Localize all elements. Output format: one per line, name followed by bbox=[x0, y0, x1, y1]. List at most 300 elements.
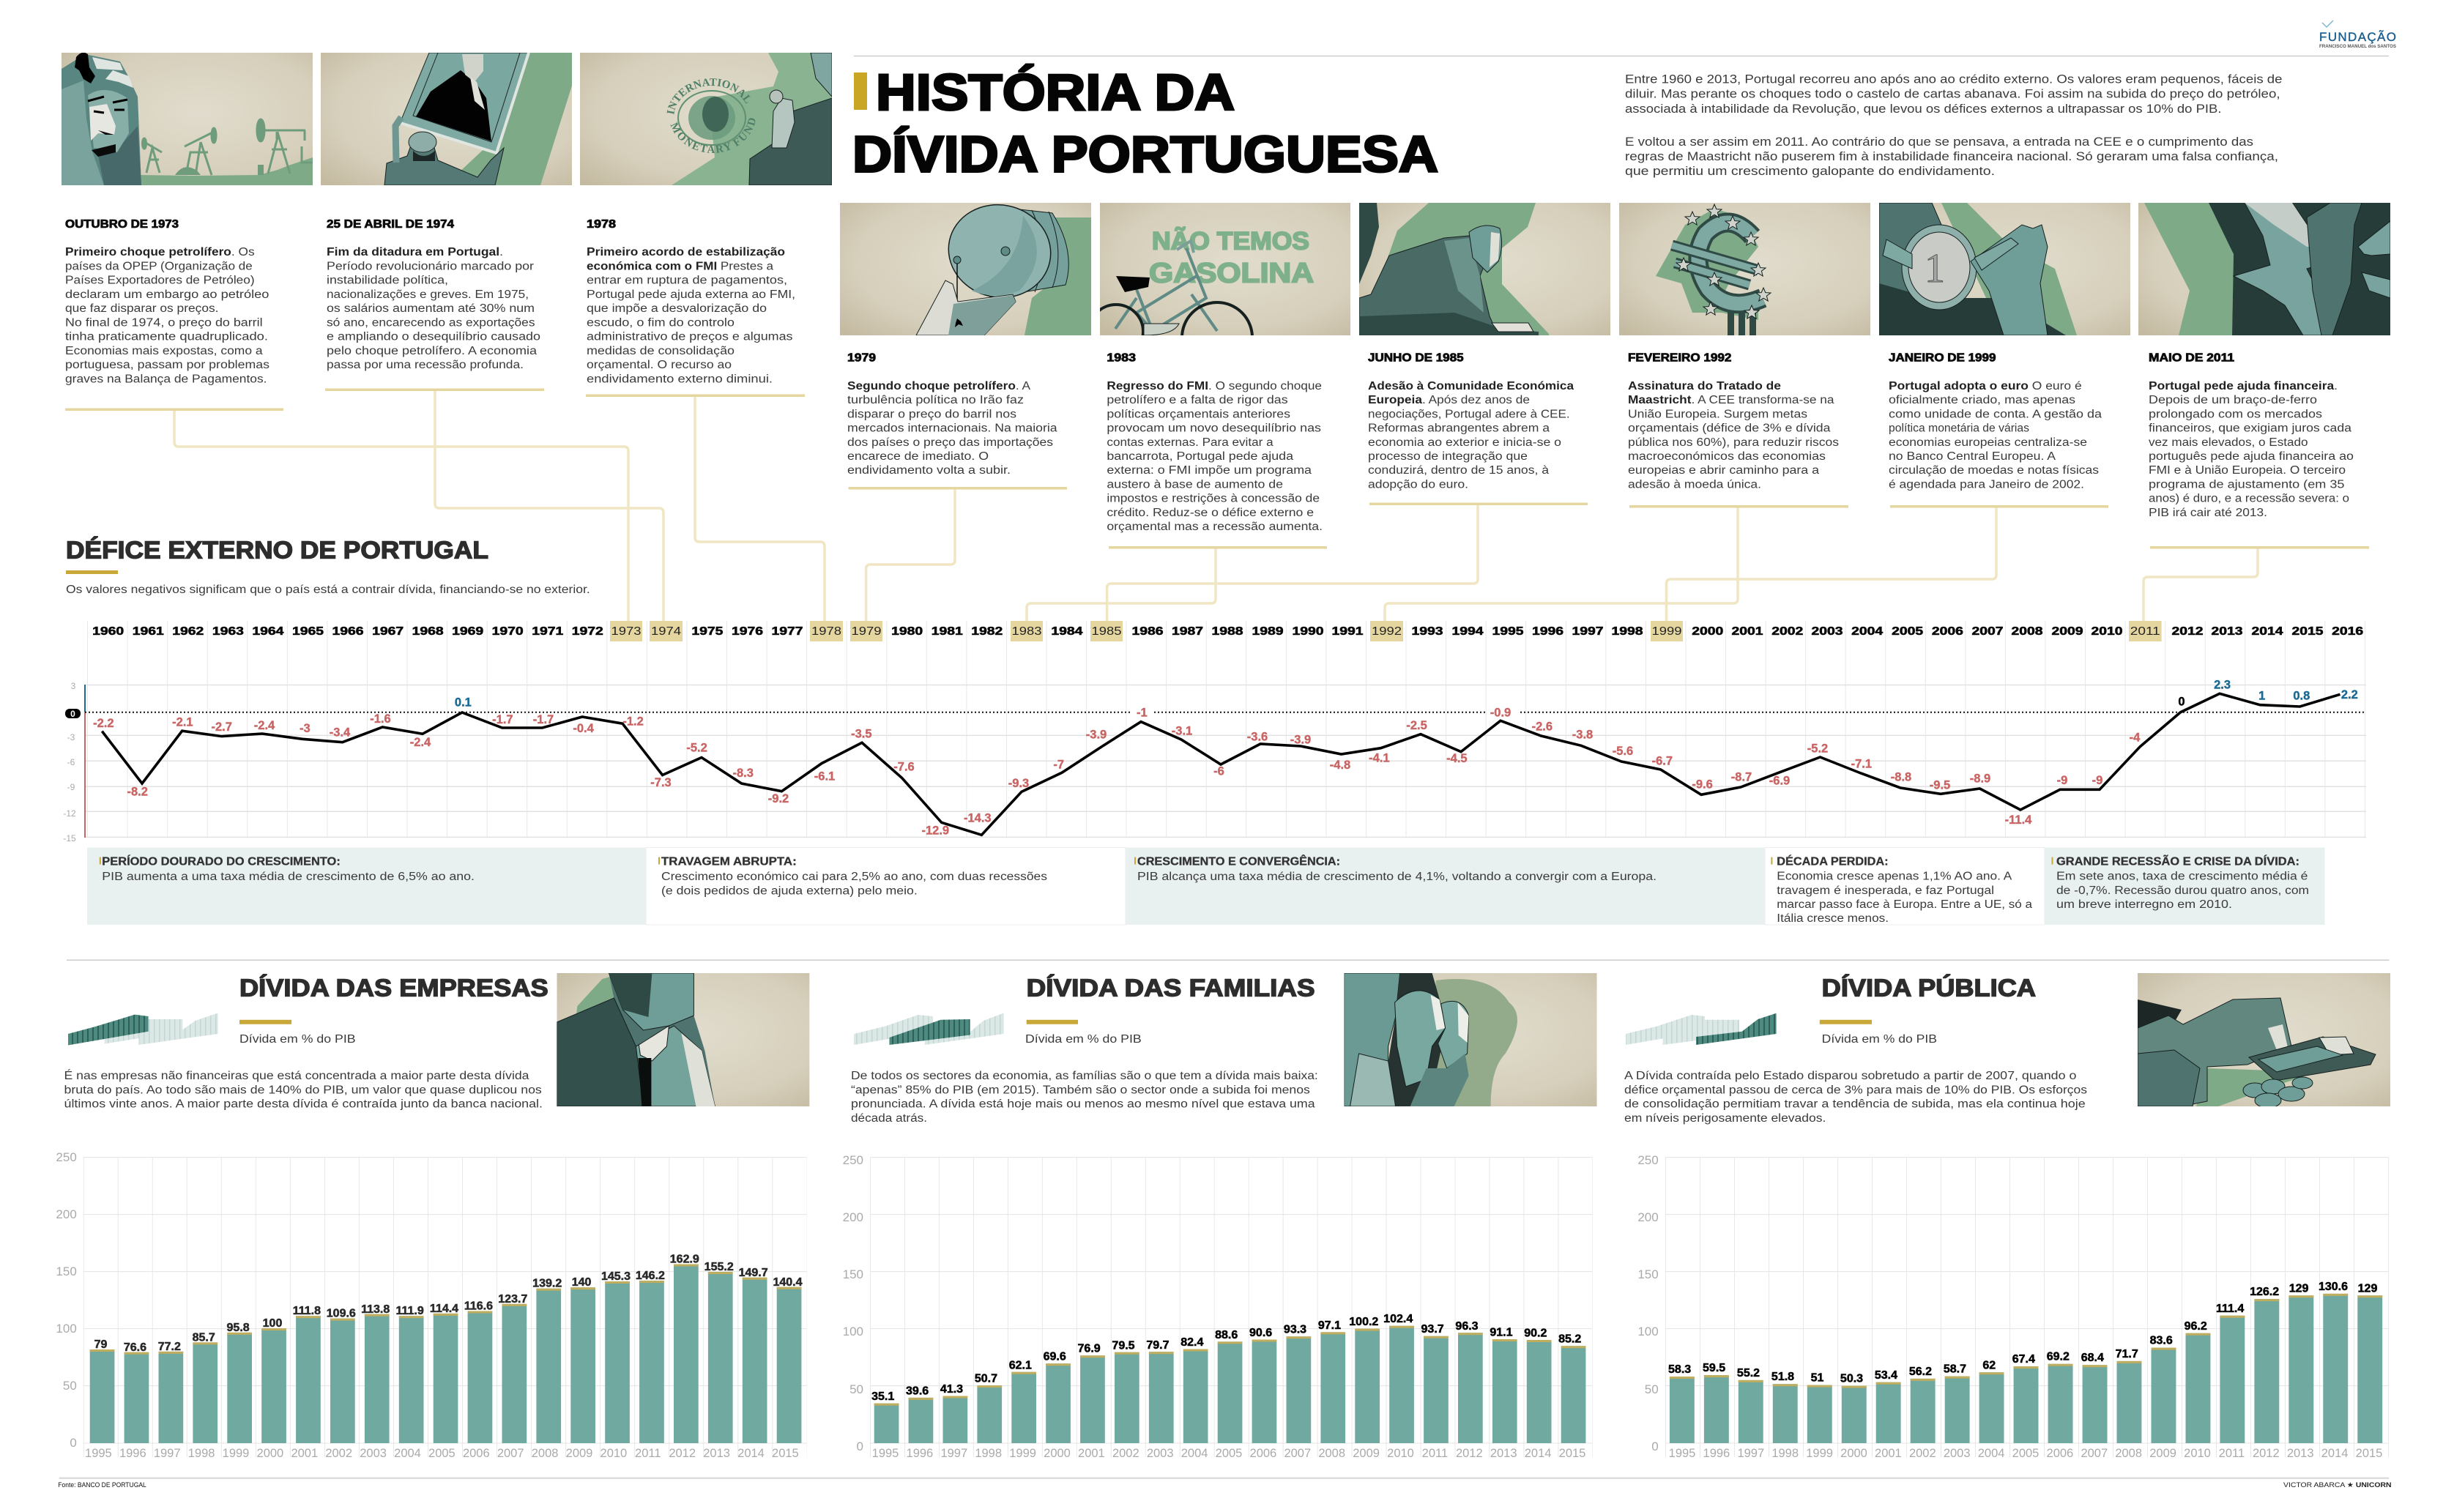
bar chart: public debt: 50.3 bbox=[1840, 1373, 1863, 1385]
bar chart: companies debt: 2005 bbox=[428, 1447, 456, 1460]
event: Maio de 2011: FMI e à União Europeia. O terceiro bbox=[2149, 464, 2346, 477]
text: public debt: A Dívida contraída pelo Estado disparou sobretudo a partir de 2007, quando o bbox=[1624, 1070, 2076, 1082]
bar chart: public debt: 2011 bbox=[2219, 1447, 2245, 1460]
illustration: bicycle and Não temos gasolina: GASOLINA bbox=[1149, 258, 1314, 289]
timeline years: 1996 bbox=[1532, 625, 1564, 638]
bar chart: family debt: 100.2 bbox=[1349, 1316, 1378, 1328]
bar chart: public debt: 126.2 bbox=[2250, 1286, 2279, 1298]
line chart: external deficit: -14.3 bbox=[964, 812, 992, 825]
panel: Grande recessão e crise da dívida: GRANDE RECESSÃO E CRISE DA DÍVIDA: bbox=[2056, 855, 2299, 868]
line chart: external deficit: -7 bbox=[1053, 758, 1064, 771]
timeline years: 1965 bbox=[292, 625, 324, 638]
event: 1983: Regresso do FMI . O segundo choque bbox=[1107, 380, 1322, 392]
bar chart: public debt: 71.7 bbox=[2116, 1348, 2138, 1360]
bar chart: public debt: 58.7 bbox=[1944, 1363, 1966, 1376]
event: Fevereiro 1992: macroeconómicos das economias bbox=[1628, 450, 1826, 463]
footer: credits: VICTOR ABARCA ★ UNICORN bbox=[2283, 1481, 2392, 1489]
event: 25 de Abril de 1974: só ano, encarecendo as exportações bbox=[327, 316, 535, 329]
timeline years: 1968 bbox=[412, 625, 444, 638]
event: 1983 bbox=[1107, 351, 1323, 533]
timeline years: 1975 bbox=[691, 625, 724, 638]
bar chart: family debt: 93.3 bbox=[1284, 1324, 1306, 1336]
line chart: external deficit: -9 bbox=[2057, 774, 2067, 787]
bar chart: public debt: 2014 bbox=[2321, 1447, 2348, 1460]
line chart: external deficit: -2.2 bbox=[93, 717, 114, 730]
line chart: external deficit: -1.2 bbox=[622, 715, 644, 728]
logo: Fundação Francisco Manuel dos Santos: FUNDAÇÃO bbox=[2319, 30, 2396, 44]
section heading: Dívida pública: DÍVIDA PÚBLICA bbox=[1822, 975, 2036, 1002]
bar chart: companies debt: 2007 bbox=[497, 1447, 524, 1460]
bar chart: family debt: 39.6 bbox=[906, 1385, 929, 1397]
event: 1983: 1983 bbox=[1107, 351, 1136, 365]
event: Fevereiro 1992: União Europeia. Surgem metas bbox=[1628, 408, 1807, 420]
bar chart: companies debt: 50 bbox=[63, 1379, 77, 1393]
timeline years: 1984 bbox=[1051, 625, 1083, 638]
timeline years: 1986 bbox=[1132, 625, 1164, 638]
text: companies bbox=[64, 1070, 543, 1111]
event: 25 de Abril de 1974: os salários aumentam até 30% num bbox=[327, 302, 535, 315]
timeline years: 2005 bbox=[1892, 625, 1924, 638]
text: public debt bbox=[1624, 1070, 2087, 1125]
bar chart: public debt: 2000 bbox=[1840, 1447, 1867, 1460]
timeline years: 1977 bbox=[772, 625, 803, 638]
footer: source: Fonte: BANCO DE PORTUGAL bbox=[58, 1481, 146, 1489]
icon: mini bars, public debt highlighted bbox=[1626, 1013, 1777, 1045]
line chart: external deficit: -2.7 bbox=[211, 720, 232, 734]
event: Janeiro de 1999 bbox=[1889, 351, 2102, 491]
bar chart: companies debt: 162.9 bbox=[670, 1254, 699, 1265]
bar chart: family debt: 62.1 bbox=[1009, 1359, 1032, 1371]
event: 1978: que impõe a desvalorização do bbox=[587, 302, 767, 315]
bar chart: family debt: 2012 bbox=[1456, 1447, 1483, 1460]
event: Junho de 1985: economia ao exterior e inicia-se o bbox=[1368, 436, 1561, 449]
bar chart: companies debt: 149.7 bbox=[739, 1267, 768, 1279]
bar chart: public debt: 2012 bbox=[2253, 1447, 2280, 1460]
timeline years: 2004 bbox=[1851, 625, 1884, 638]
event: 1978: Portugal pede ajuda externa ao FMI, bbox=[587, 288, 795, 301]
bar chart: family debt: 0 bbox=[857, 1440, 863, 1453]
bar chart: public debt: 1995 bbox=[1669, 1447, 1695, 1460]
event: Maio de 2011: programa de ajustamento (em 35 bbox=[2149, 478, 2345, 491]
bar chart: companies debt: 2014 bbox=[737, 1447, 765, 1460]
line chart: external deficit: -5.2 bbox=[1807, 742, 1828, 756]
bar chart: companies debt: 2004 bbox=[394, 1447, 421, 1460]
heading: Défice externo de Portugal bbox=[66, 536, 590, 596]
bar chart: public debt: 2010 bbox=[2184, 1447, 2211, 1460]
text: families: década atrás. bbox=[851, 1112, 927, 1125]
illustration: empty wallet bbox=[2138, 203, 2390, 335]
illustration: one euro coin between fingers: 1 bbox=[1925, 246, 1945, 291]
event: Junho de 1985: adopção do euro. bbox=[1368, 478, 1468, 491]
section heading: Dívida das familias bbox=[1025, 975, 1315, 1046]
bar chart: companies debt: 95.8 bbox=[227, 1322, 250, 1334]
panel: Crescimento e convergência: CRESCIMENTO E CONVERGÊNCIA: bbox=[1137, 855, 1340, 868]
event: Janeiro de 1999: economias europeias centraliza-se bbox=[1889, 436, 2087, 449]
bar chart: public debt: 250 bbox=[1637, 1153, 1659, 1167]
event: Junho de 1985: negociações, Portugal adere à CEE. bbox=[1368, 408, 1570, 420]
line chart: external deficit: -1.7 bbox=[533, 713, 554, 726]
bar chart: public debt: 200 bbox=[1637, 1210, 1659, 1224]
bar chart: public debt: 1997 bbox=[1737, 1447, 1764, 1460]
event: Janeiro de 1999: no Banco Central Europeu. A bbox=[1889, 450, 2056, 463]
bar chart: public debt: 51.8 bbox=[1771, 1371, 1794, 1383]
panel: Década perdida: travagem é inesperada, e faz Portugal bbox=[1777, 885, 1994, 897]
bar chart: public debt: 1999 bbox=[1806, 1447, 1833, 1460]
event: 1983: externa: o FMI impõe um programa bbox=[1107, 464, 1312, 477]
text: families: “apenas” 85% do PIB (em 2015). Também são o sector onde a subida foi menos bbox=[851, 1084, 1310, 1096]
line chart: external deficit: -8.2 bbox=[127, 786, 148, 799]
event: Fevereiro 1992: pública nos 60%), para reduzir riscos bbox=[1628, 436, 1839, 449]
timeline years: 1990 bbox=[1292, 625, 1324, 638]
illustration: family looking ahead bbox=[1345, 973, 1597, 1106]
timeline years: 2014 bbox=[2251, 625, 2283, 638]
timeline years: 2006 bbox=[1932, 625, 1963, 638]
bar chart: companies debt: 1996 bbox=[119, 1447, 146, 1460]
intro text: que permitiu um crescimento galopante do endividamento. bbox=[1625, 164, 1995, 178]
event: 1979: dos países o preço das importações bbox=[847, 436, 1053, 449]
bar chart: companies debt: 250 bbox=[56, 1150, 77, 1164]
timeline years: 1992 bbox=[1372, 625, 1402, 638]
bar chart: companies debt: 111.9 bbox=[395, 1305, 424, 1317]
event: Outubro de 1973: No final de 1974, o preço do barril bbox=[65, 316, 263, 329]
event: 25 de Abril de 1974: passa por uma recessão profunda. bbox=[327, 359, 524, 371]
bar chart: companies debt: 100 bbox=[263, 1317, 282, 1330]
panel: Crescimento e convergência bbox=[1126, 848, 1765, 925]
event: 1979: disparar o preço do barril nos bbox=[847, 408, 1016, 420]
bar chart: public debt: 100 bbox=[1637, 1325, 1659, 1338]
timeline years: 2010 bbox=[2092, 625, 2122, 638]
timeline years: 2002 bbox=[1771, 625, 1803, 638]
timeline years: 1998 bbox=[1611, 625, 1643, 638]
panel: Crescimento e convergência: PIB alcança uma taxa média de crescimento de 4,1%, voltando a convergir com a Europa. bbox=[1137, 871, 1657, 883]
timeline years: 1960 bbox=[92, 625, 124, 638]
event: 1978 bbox=[587, 218, 795, 385]
bar chart: companies debt: 114.4 bbox=[430, 1303, 458, 1315]
timeline years bbox=[92, 621, 2364, 641]
bar chart: family debt: 1996 bbox=[907, 1447, 933, 1460]
bar chart: companies debt: 1998 bbox=[188, 1447, 215, 1460]
line chart: external deficit: -3.4 bbox=[330, 726, 351, 740]
line chart: external deficit: -8.3 bbox=[732, 767, 754, 780]
bar chart: public debt: 53.4 bbox=[1875, 1369, 1897, 1382]
title bbox=[852, 64, 1438, 183]
illustration: IMF seal and man with coin: INTERNATIONAL bbox=[666, 78, 750, 114]
section heading: Dívida das empresas: DÍVIDA DAS EMPRESAS bbox=[239, 975, 549, 1002]
bar chart: public debt: 2013 bbox=[2287, 1447, 2314, 1460]
bar chart: public debt: 62 bbox=[1982, 1359, 1996, 1371]
timeline years: 1969 bbox=[452, 625, 484, 638]
event: Janeiro de 1999: como unidade de conta. A gestão da bbox=[1889, 408, 2102, 420]
bar chart: companies debt: 111.8 bbox=[293, 1305, 321, 1317]
event: Outubro de 1973: Primeiro choque petrolífero . Os bbox=[65, 246, 255, 258]
bar chart: public debt: 2005 bbox=[2012, 1447, 2039, 1460]
event: Maio de 2011 bbox=[2149, 351, 2354, 519]
panel: Travagem abrupta bbox=[646, 848, 1126, 925]
bar chart: companies debt: 2011 bbox=[635, 1447, 661, 1460]
bar chart: public debt: 55.2 bbox=[1737, 1367, 1760, 1379]
event: Janeiro de 1999: oficialmente criado, mas apenas bbox=[1889, 394, 2075, 406]
bar chart: companies debt: 85.7 bbox=[193, 1331, 215, 1344]
section heading: Dívida das familias: Dívida em % do PIB bbox=[1025, 1033, 1142, 1046]
event: 1978: 1978 bbox=[587, 218, 616, 231]
event: Outubro de 1973 bbox=[65, 218, 269, 385]
heading: Défice externo de Portugal: DÉFICE EXTERNO DE PORTUGAL bbox=[66, 536, 488, 564]
line chart: external deficit: -5.2 bbox=[686, 741, 707, 754]
event: Junho de 1985: processo de integração que bbox=[1368, 450, 1528, 463]
intro text: diluir. Mas perante os choques todo o castelo de cartas abanava. Foi assim na subida do preço do petróleo, bbox=[1625, 86, 2280, 100]
line chart: external deficit: -3.9 bbox=[1290, 734, 1311, 747]
bar chart: companies debt bbox=[56, 1150, 807, 1460]
event: 25 de Abril de 1974: pelo choque petrolífero. A economia bbox=[327, 345, 537, 357]
event: Maio de 2011: PIB irá cair até 2013. bbox=[2149, 507, 2267, 519]
bar chart: family debt: 97.1 bbox=[1318, 1319, 1341, 1332]
bar chart: public debt: 2007 bbox=[2081, 1447, 2108, 1460]
bar chart: public debt: 0 bbox=[1651, 1440, 1659, 1453]
line chart: external deficit: -4.1 bbox=[1369, 751, 1390, 764]
line chart: external deficit: 0 bbox=[2178, 696, 2185, 709]
panel: Grande recessão e crise da dívida: Em sete anos, taxa de crescimento média é bbox=[2056, 871, 2308, 883]
text: public debt: défice orçamental passou de cerca de 3% para mais de 10% do PIB. Os esforços bbox=[1624, 1084, 2087, 1096]
event: Maio de 2011: Depois de um braço-de-ferro bbox=[2149, 394, 2317, 406]
illustration: bicycle and Não temos gasolina: NÃO TEMOS bbox=[1152, 227, 1309, 255]
bar chart: public debt bbox=[1637, 1153, 2389, 1460]
icon: mini bars, families highlighted bbox=[854, 1013, 1004, 1045]
line chart: external deficit: -3.9 bbox=[1086, 728, 1107, 741]
panel: Travagem abrupta: Crescimento económico cai para 2,5% ao ano, com duas recessões bbox=[661, 871, 1047, 883]
bar chart: companies debt: 2006 bbox=[463, 1447, 490, 1460]
line chart: external deficit: -3.1 bbox=[1172, 725, 1192, 738]
bar chart: family debt: 2014 bbox=[1525, 1447, 1551, 1460]
event: 1983: provocam um novo desequilíbrio nas bbox=[1107, 422, 1321, 435]
line chart: external deficit: 3 bbox=[71, 681, 76, 691]
bar chart: family debt: 88.6 bbox=[1215, 1329, 1238, 1341]
event: Junho de 1985: Reformas abrangentes abrem a bbox=[1368, 422, 1550, 435]
timeline years: 2012 bbox=[2172, 625, 2203, 638]
bar chart: companies debt: 2001 bbox=[291, 1447, 318, 1460]
timeline years: 1973 bbox=[611, 625, 642, 638]
timeline years: 1964 bbox=[252, 625, 284, 638]
bar chart: family debt: 2015 bbox=[1559, 1447, 1585, 1460]
bar chart: companies debt: 79 bbox=[94, 1338, 107, 1351]
timeline years: 1978 bbox=[811, 625, 841, 638]
bar chart: family debt: 82.4 bbox=[1180, 1336, 1203, 1349]
text: public debt: em níveis perigosamente elevados. bbox=[1624, 1112, 1826, 1125]
text: public debt: de consolidação permitiam travar a tendência de subida, mas ela continua hoje bbox=[1624, 1098, 2086, 1111]
line chart: external deficit: -3.8 bbox=[1572, 729, 1593, 742]
timeline years: 1995 bbox=[1492, 625, 1524, 638]
event: Fevereiro 1992: FEVEREIRO 1992 bbox=[1628, 351, 1731, 365]
panel: Década perdida: Economia cresce apenas 1,1% AO ano. A bbox=[1777, 871, 2012, 883]
bar chart: public debt: 129 bbox=[2289, 1282, 2309, 1295]
panel: Década perdida: DÉCADA PERDIDA: bbox=[1777, 856, 1889, 868]
bar chart: family debt: 96.3 bbox=[1455, 1320, 1479, 1333]
line chart: external deficit: -11.4 bbox=[2005, 813, 2032, 827]
panel: Travagem abrupta: (e dois pedidos de ajuda externa) pelo meio. bbox=[661, 885, 918, 897]
line chart: external deficit: -2.6 bbox=[1532, 720, 1553, 734]
event: 1983: petrolífero e a falta de rigor das bbox=[1107, 394, 1288, 406]
bar chart: companies debt: 116.6 bbox=[464, 1300, 493, 1312]
line chart: external deficit: -4 bbox=[2130, 731, 2141, 745]
event: 1983: austero à base de aumento de bbox=[1107, 478, 1283, 491]
text: companies: bruta do país. Ao todo são mais de 140% do PIB, um valor que quase duplicou nos bbox=[64, 1084, 542, 1096]
timeline years: 2015 bbox=[2292, 625, 2324, 638]
timeline years: 2016 bbox=[2332, 625, 2364, 638]
panel: Década perdida bbox=[1765, 848, 2045, 925]
bar chart: companies debt: 140.4 bbox=[773, 1276, 803, 1289]
bar chart: companies debt: 123.7 bbox=[498, 1293, 527, 1306]
timeline years: 1985 bbox=[1091, 625, 1122, 638]
connectors from events to timeline years bbox=[65, 388, 2369, 621]
bar chart: companies debt: 1997 bbox=[154, 1447, 181, 1460]
event: Outubro de 1973: que faz disparar os preços. bbox=[65, 302, 218, 315]
event: Maio de 2011: português pede ajuda financeira ao bbox=[2149, 450, 2354, 463]
panel: Período dourado do crescimento bbox=[87, 848, 646, 925]
bar chart: companies debt: 2002 bbox=[325, 1447, 352, 1460]
illustration: portrait being carried bbox=[321, 53, 572, 185]
timeline years: 1982 bbox=[971, 625, 1003, 638]
intro text: Entre 1960 e 2013, Portugal recorreu ano após ano ao crédito externo. Os valores eram pequenos, fáceis de bbox=[1625, 72, 2282, 86]
bar chart: public debt: 2003 bbox=[1944, 1447, 1971, 1460]
timeline years: 1997 bbox=[1572, 625, 1604, 638]
line chart: external deficit: 0.8 bbox=[2293, 689, 2310, 702]
line chart: external deficit: -2.4 bbox=[254, 719, 275, 732]
event: 25 de Abril de 1974: 25 DE ABRIL DE 1974 bbox=[327, 218, 454, 231]
bar chart: family debt: 79.5 bbox=[1112, 1339, 1135, 1352]
bar chart: companies debt: 2003 bbox=[360, 1447, 387, 1460]
bar chart: family debt: 2002 bbox=[1112, 1447, 1139, 1460]
event: 1983: políticas orçamentais anteriores bbox=[1107, 408, 1290, 420]
line chart: external deficit: -8.7 bbox=[1731, 771, 1752, 784]
event: 1978: orçamental. O recurso ao bbox=[587, 359, 732, 371]
bar chart: family debt bbox=[843, 1153, 1593, 1460]
bar chart: family debt: 100 bbox=[843, 1325, 863, 1338]
line chart: external deficit: -9 bbox=[2092, 774, 2102, 787]
bar chart: family debt: 1998 bbox=[975, 1447, 1002, 1460]
bar chart: companies debt: 139.2 bbox=[532, 1278, 562, 1290]
bar chart: companies debt: 146.2 bbox=[636, 1270, 665, 1282]
bar chart: family debt: 2005 bbox=[1216, 1447, 1242, 1460]
bar chart: family debt: 102.4 bbox=[1383, 1313, 1413, 1325]
event: Janeiro de 1999: política monetária de várias bbox=[1889, 422, 2029, 435]
event: 1979: 1979 bbox=[847, 351, 876, 365]
event: Outubro de 1973: Economias mais expostas, como a bbox=[65, 345, 263, 357]
bar chart: public debt: 56.2 bbox=[1909, 1366, 1932, 1378]
line chart: external deficit: -9.3 bbox=[1008, 777, 1029, 790]
line chart: external deficit: -8.9 bbox=[1970, 772, 1990, 786]
illustration: man signing treaty bbox=[1359, 203, 1610, 335]
timeline years: 1974 bbox=[651, 625, 681, 638]
bar chart: public debt: 50 bbox=[1645, 1382, 1659, 1396]
event: Fevereiro 1992: orçamentais (défice de 3% e dívida bbox=[1628, 422, 1831, 435]
bar chart: family debt: 35.1 bbox=[871, 1390, 894, 1403]
event: 1978: Primeiro acordo de estabilização bbox=[587, 246, 785, 258]
event: Maio de 2011: financeiros, que exigiam juros cada bbox=[2149, 422, 2351, 435]
panel: Grande recessão e crise da dívida: um breve interregno em 2010. bbox=[2056, 898, 2232, 911]
event: 1983: impostos e restrições à concessão de bbox=[1107, 493, 1320, 505]
line chart: external deficit: -3 bbox=[300, 722, 311, 735]
bar chart: family debt: 1999 bbox=[1009, 1447, 1036, 1460]
intro text: associada à intabilidade da Revolução, que levou os défices externos a ultrapassar os 10% do PIB. bbox=[1625, 102, 2222, 116]
bar chart: companies debt: 109.6 bbox=[327, 1308, 356, 1320]
event: 1979: Segundo choque petrolífero . A bbox=[847, 380, 1031, 392]
event: 1983: orçamental mas a recessão aumenta. bbox=[1107, 521, 1323, 533]
illustration: one euro coin between fingers bbox=[1879, 203, 2130, 335]
timeline years: 1962 bbox=[172, 625, 204, 638]
bar chart: companies debt: 2015 bbox=[772, 1447, 799, 1460]
timeline years: 2001 bbox=[1731, 625, 1763, 638]
line chart: external deficit: -4.8 bbox=[1330, 759, 1350, 772]
timeline years: 2000 bbox=[1692, 625, 1723, 638]
line chart: external deficit: -1.6 bbox=[370, 712, 391, 726]
panel: Grande recessão e crise da dívida: de -0,7%. Recessão durou quatro anos, com bbox=[2056, 885, 2309, 897]
line chart: external deficit: -8.8 bbox=[1891, 771, 1911, 784]
event: 1983: bancarrota, Portugal pede ajuda bbox=[1107, 450, 1293, 463]
line chart: external deficit: 2.3 bbox=[2214, 679, 2231, 692]
line chart: external deficit: -6 bbox=[1213, 764, 1224, 778]
bar chart: companies debt: 155.2 bbox=[704, 1261, 734, 1273]
timeline years: 1971 bbox=[532, 625, 564, 638]
event: 1978: endividamento externo diminui. bbox=[587, 373, 773, 385]
event: Fevereiro 1992 bbox=[1628, 351, 1839, 491]
line chart: external deficit: 0 bbox=[70, 709, 75, 719]
illustration: IMF seal and man with coin bbox=[580, 53, 832, 185]
bar chart: family debt: 79.7 bbox=[1146, 1339, 1170, 1352]
illustration: bicycle and Não temos gasolina bbox=[1089, 203, 1350, 373]
timeline years: 1988 bbox=[1211, 625, 1243, 638]
line chart: external deficit: -2.4 bbox=[410, 736, 431, 749]
event: 1983: contas externas. Para evitar a bbox=[1107, 436, 1274, 449]
bar chart: companies debt: 113.8 bbox=[361, 1303, 390, 1316]
timeline years: 1999 bbox=[1652, 625, 1681, 638]
timeline years: 1961 bbox=[133, 625, 164, 638]
bar chart: public debt: 59.5 bbox=[1703, 1362, 1725, 1374]
bar chart: family debt: 150 bbox=[843, 1267, 863, 1281]
bar chart: family debt: 50.7 bbox=[975, 1373, 997, 1385]
title: HISTÓRIA DA bbox=[876, 64, 1235, 121]
bar chart: companies debt: 2012 bbox=[669, 1447, 696, 1460]
text: families: De todos os sectores da economia, as famílias são o que tem a dívida mais baixa: bbox=[851, 1070, 1318, 1082]
illustration: hand on calculator bbox=[2138, 973, 2390, 1108]
intro text bbox=[1625, 72, 2282, 178]
bar chart: companies debt: 145.3 bbox=[601, 1270, 631, 1283]
section heading: Dívida das empresas: Dívida em % do PIB bbox=[239, 1033, 356, 1046]
timeline years: 1966 bbox=[332, 625, 364, 638]
line chart: external deficit: 2.2 bbox=[2341, 688, 2358, 701]
event: Fevereiro 1992: Maastricht . A CEE transforma-se na bbox=[1628, 394, 1834, 406]
event: 1979: mercados internacionais. Na maioria bbox=[847, 422, 1057, 435]
section heading: Dívida das empresas bbox=[239, 975, 549, 1046]
bar chart: public debt: 2008 bbox=[2115, 1447, 2142, 1460]
bar chart: public debt: 83.6 bbox=[2150, 1335, 2173, 1347]
bar chart: family debt: 90.2 bbox=[1524, 1327, 1547, 1340]
line chart: external deficit: -6.7 bbox=[1652, 755, 1673, 768]
event: Maio de 2011: MAIO DE 2011 bbox=[2149, 351, 2234, 365]
timeline years: 1994 bbox=[1451, 625, 1484, 638]
timeline years: 2007 bbox=[1971, 625, 2004, 638]
timeline years: 1979 bbox=[851, 625, 882, 638]
bar chart: companies debt: 2008 bbox=[532, 1447, 558, 1460]
bar chart: family debt: 76.9 bbox=[1078, 1343, 1101, 1355]
event: 25 de Abril de 1974: nacionalizações e greves. Em 1975, bbox=[327, 288, 529, 301]
line chart: external deficit: -1 bbox=[1137, 707, 1148, 720]
bar chart: family debt: 69.6 bbox=[1044, 1351, 1066, 1363]
bar chart: public debt: 2002 bbox=[1909, 1447, 1936, 1460]
bar chart: companies debt: 0 bbox=[70, 1436, 77, 1450]
event: Junho de 1985: Adesão à Comunidade Económica bbox=[1368, 380, 1574, 392]
bar chart: public debt: 2004 bbox=[1978, 1447, 2004, 1460]
panel: Período dourado do crescimento: PERÍODO DOURADO DO CRESCIMENTO: bbox=[102, 856, 341, 868]
line chart: external deficit: -7.6 bbox=[893, 761, 915, 774]
